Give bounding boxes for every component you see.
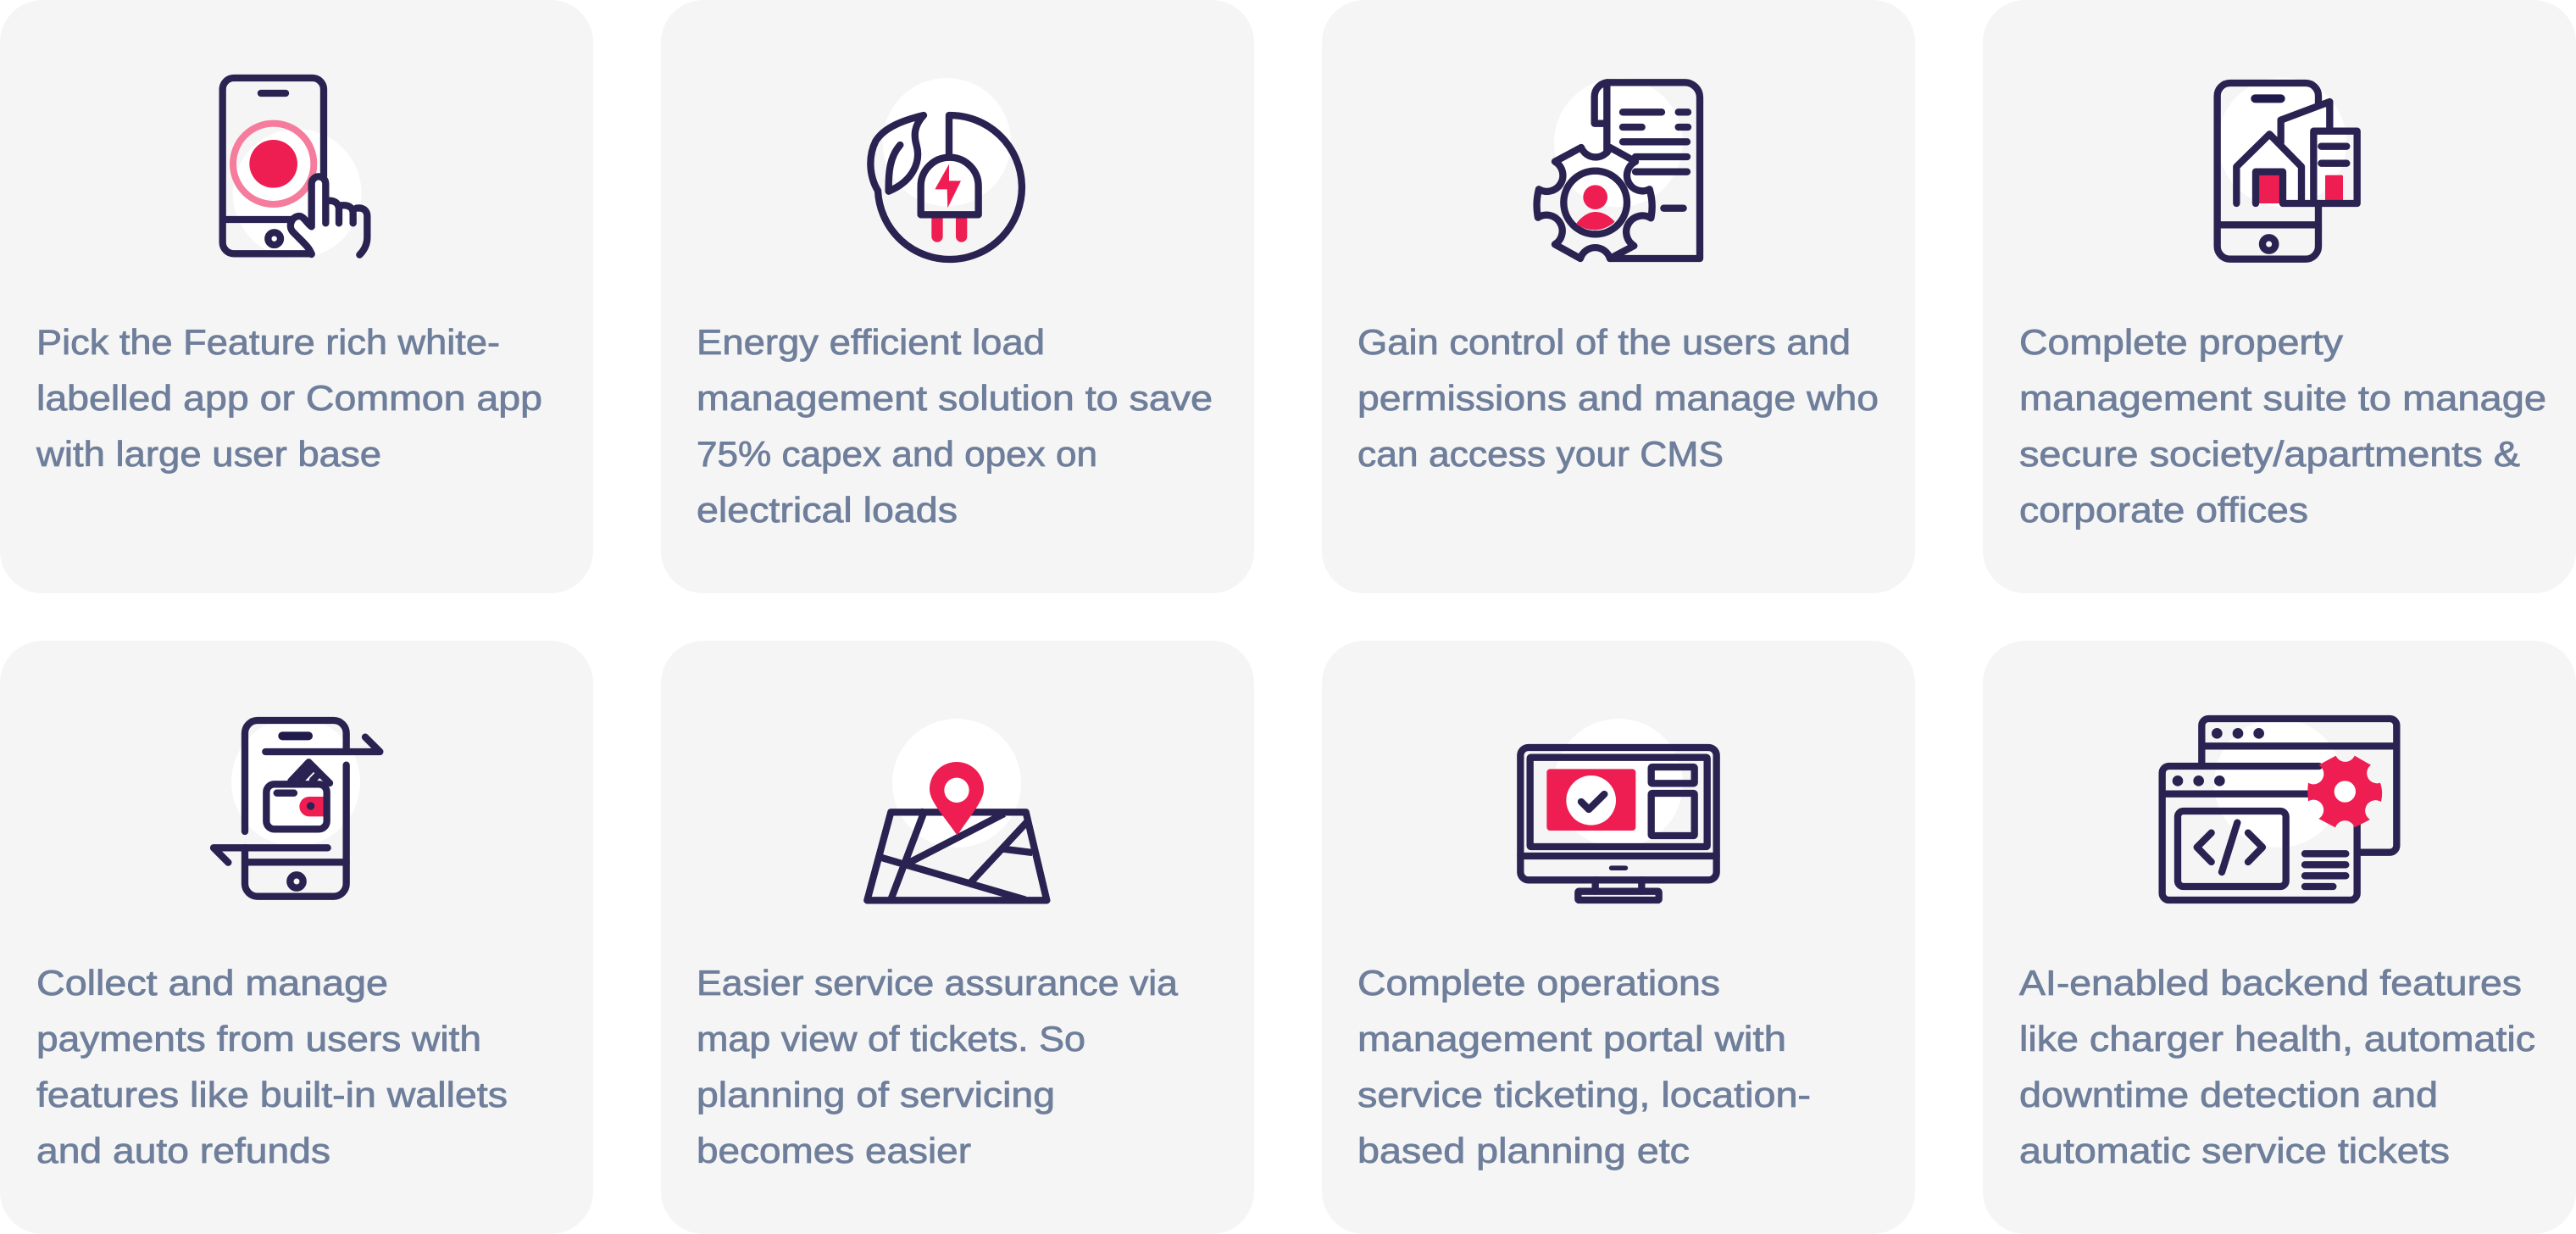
text: card 8 description: downtime detection and [2019,1075,2438,1114]
text: card 4 description [2019,322,2546,530]
icon: desktop monitor with check [1520,719,1717,900]
text: card 1 description: Pick the Feature rich white- [36,322,500,362]
icon: code windows with gear [2162,719,2396,900]
text: card 3 description [1357,322,1879,474]
icon: map with location pin [867,719,1046,900]
text: card 5 description [36,963,508,1170]
text: card 1 description [36,322,542,474]
text: card 3 description: can access your CMS [1357,434,1724,474]
text: card 4 description: corporate offices [2019,490,2308,530]
text: card 1 description: with large user base [36,434,381,474]
panel: white-labelled app [0,0,593,593]
text: card 2 description [697,322,1213,530]
text: card 8 description: automatic service tickets [2019,1131,2450,1170]
text: card 6 description [697,963,1179,1170]
text: card 6 description: Easier service assurance via [697,963,1179,1003]
text: card 7 description: management portal with [1357,1019,1786,1059]
panel: service assurance map view [661,641,1254,1234]
text: card 6 description: becomes easier [697,1131,971,1170]
text: card 7 description [1357,963,1811,1170]
panel: property management suite [1983,0,2576,593]
icon: phone with tapping hand [223,78,367,258]
text: card 6 description: map view of tickets. So [697,1019,1085,1059]
icon: location pin [930,762,984,836]
icon: document with user gear [1537,78,1700,258]
text: card 4 description: secure society/apartments & [2019,434,2520,474]
text: card 4 description: Complete property [2019,322,2343,362]
text: card 7 description: based planning etc [1357,1131,1690,1170]
text: card 5 description: payments from users with [36,1019,481,1059]
icon: phone with house and building [2218,78,2357,259]
icon: red gear [2307,756,2382,827]
text: card 4 description: management suite to manage [2019,378,2546,418]
text: card 2 description: management solution to save [697,378,1213,418]
text: card 2 description: 75% capex and opex on [697,434,1097,474]
text: card 3 description: Gain control of the users and [1357,322,1851,362]
text: card 7 description: Complete operations [1357,963,1720,1003]
text: card 7 description: service ticketing, location- [1357,1075,1811,1114]
text: card 1 description: labelled app or Common app [36,378,542,418]
text: card 8 description: AI-enabled backend features [2019,963,2522,1003]
text: card 8 description [2019,963,2535,1170]
panel: operations management portal [1322,641,1915,1234]
panel: users and permissions [1322,0,1915,593]
text: card 2 description: Energy efficient load [697,322,1045,362]
text: card 8 description: like charger health, automatic [2019,1019,2535,1059]
panel: AI-enabled backend [1983,641,2576,1234]
text: card 5 description: Collect and manage [36,963,388,1003]
text: card 6 description: planning of servicing [697,1075,1055,1114]
icon: leaf and plug [870,78,1022,259]
panel: payments and wallets [0,641,593,1234]
panel: energy efficient load management [661,0,1254,593]
text: card 5 description: and auto refunds [36,1131,330,1170]
icon: phone with wallet and exchange arrows [214,718,380,897]
text: card 3 description: permissions and manage who [1357,378,1879,418]
text: card 2 description: electrical loads [697,490,958,530]
text: card 5 description: features like built-in wallets [36,1075,508,1114]
